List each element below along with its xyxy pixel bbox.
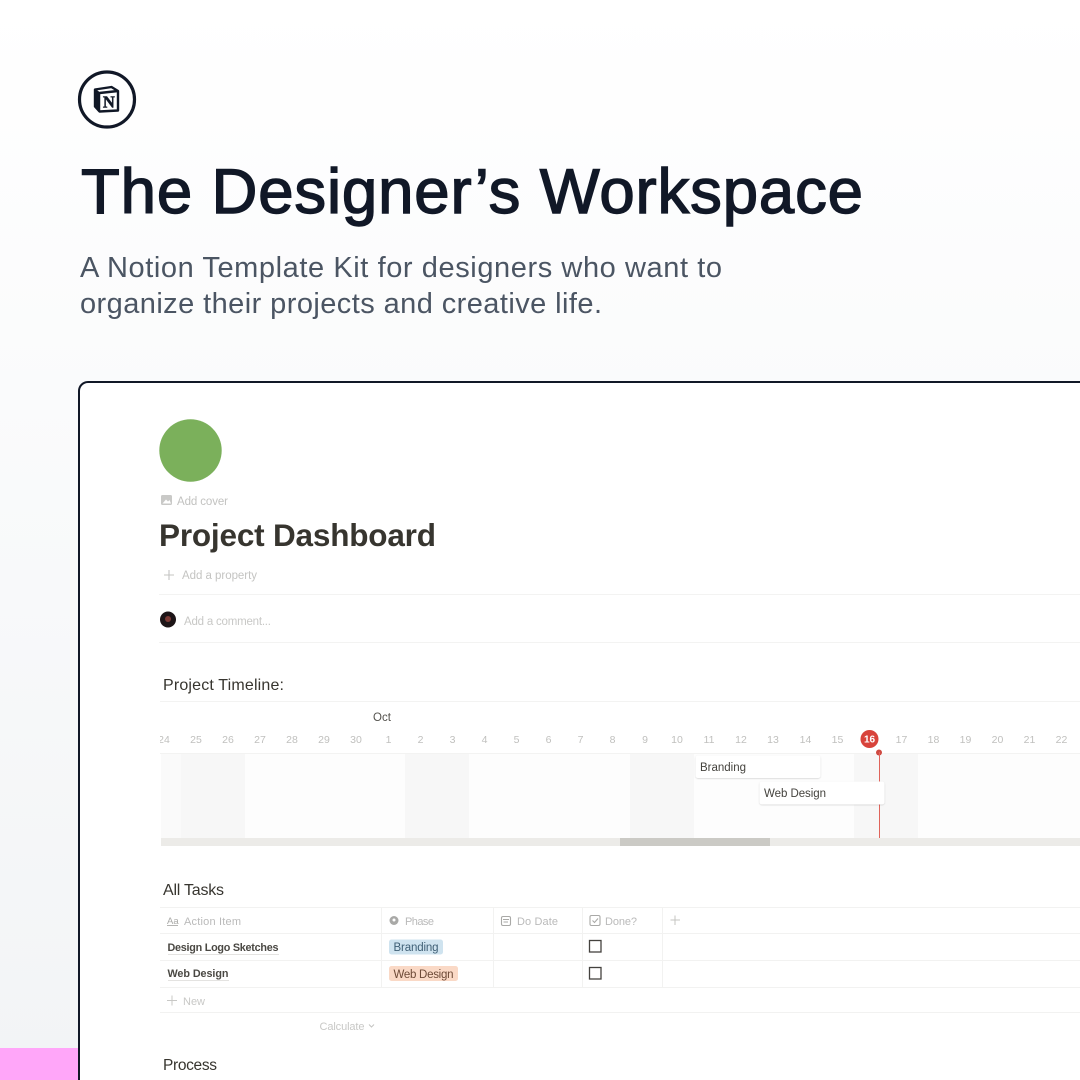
add a property row: Add a property [182, 570, 257, 582]
day labels: 20 [992, 734, 1003, 746]
day labels [158, 734, 1067, 746]
heading: process: Process [163, 1057, 217, 1074]
row: web design: Web Design [394, 969, 454, 981]
bar: Branding: Branding [700, 762, 746, 774]
column: done [590, 916, 637, 928]
day labels: 2 [418, 734, 424, 746]
page heading: Project Dashboard [159, 517, 436, 553]
day labels: 6 [546, 734, 552, 746]
day labels: 12 [735, 734, 747, 746]
day labels: 5 [514, 734, 520, 746]
calculate control: Calculate [320, 1021, 364, 1033]
today marker [860, 730, 882, 838]
day labels: 3 [450, 734, 456, 746]
heading: all tasks: All Tasks [163, 882, 224, 899]
tasks table [160, 907, 1080, 1033]
subtitle [80, 252, 722, 320]
row: web design [168, 966, 601, 981]
bar: Web Design: Web Design [764, 788, 826, 800]
month label: Oct [373, 712, 392, 724]
day labels: 9 [642, 734, 648, 746]
day labels: 27 [254, 734, 266, 746]
day labels: 30 [350, 734, 362, 746]
icon: Notion logo badge: N [103, 92, 115, 112]
day labels: 18 [928, 734, 939, 746]
column: phase: Phase [405, 916, 434, 928]
row: web design: Web Design [168, 968, 228, 980]
comment row [160, 612, 271, 628]
heading: project timeline: Project Timeline: [163, 677, 284, 694]
column: done: Done? [605, 916, 637, 928]
add column button [670, 916, 680, 925]
day labels: 29 [318, 734, 330, 746]
day labels: 21 [1024, 734, 1035, 746]
day labels: 15 [832, 734, 843, 746]
day labels: 11 [704, 734, 715, 746]
day labels: 19 [960, 734, 971, 746]
day labels: 8 [610, 734, 616, 746]
day labels: 28 [286, 734, 298, 746]
day labels: 17 [896, 734, 907, 746]
add cover link: Add cover [177, 496, 228, 508]
day labels: 1 [386, 734, 392, 746]
icon: green page circle [159, 419, 222, 482]
day labels: 7 [578, 734, 584, 746]
row: design logo sketches: Branding [394, 942, 438, 954]
timeline background [161, 754, 1080, 838]
weekend bands [161, 754, 918, 838]
day labels: 25 [190, 734, 202, 746]
row: design logo sketches [168, 940, 601, 955]
pink accent block [0, 1048, 80, 1080]
day labels: 24 [158, 734, 170, 746]
scrollbar [161, 838, 1080, 846]
subtitle: A Notion Template Kit for designers who want to [80, 252, 722, 284]
icon: Notion logo badge [80, 72, 134, 127]
day labels: 10 [671, 734, 683, 746]
day labels: 14 [800, 734, 811, 746]
title: The Designer’s Workspace [81, 157, 863, 227]
bar: Web Design [760, 782, 884, 804]
table header [167, 916, 680, 928]
today marker: 16 [864, 734, 875, 746]
column: action item: Aa [167, 916, 179, 927]
column: phase [390, 916, 434, 928]
column: action item: Action Item [184, 916, 241, 928]
panel: Notion dashboard window [79, 382, 1080, 1080]
timeline chart [150, 712, 1080, 846]
day labels: 4 [482, 734, 488, 746]
new row button [167, 996, 205, 1008]
row: design logo sketches: Design Logo Sketches [168, 942, 278, 954]
comment row: Add a comment... [184, 616, 271, 628]
day labels: 22 [1056, 734, 1067, 746]
day labels: 13 [767, 734, 779, 746]
bar: Branding [696, 756, 820, 778]
subtitle: organize their projects and creative life. [80, 288, 602, 320]
new row button: New [183, 996, 205, 1008]
day labels: 26 [222, 734, 234, 746]
column: do date: Do Date [517, 916, 558, 928]
